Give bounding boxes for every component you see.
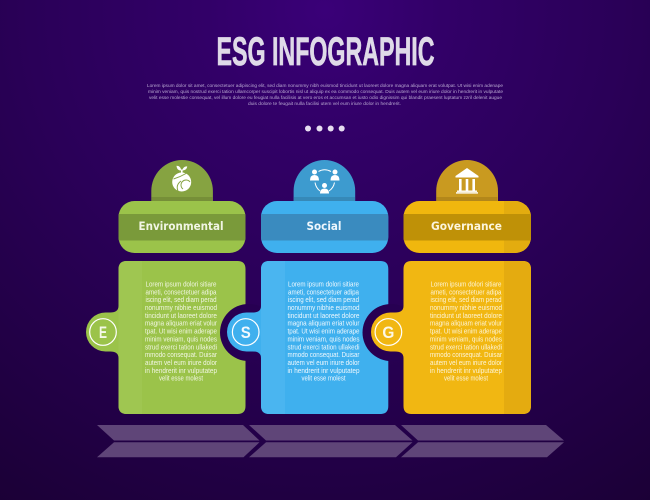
tab letter: G: G <box>382 323 394 342</box>
body text: Environmental: velit esse molest <box>159 374 203 383</box>
notch cut between blue and yellow cards <box>362 304 420 361</box>
tab letter: E: E <box>99 323 107 342</box>
body text: Governance: tincidunt ut laoreet dolore <box>430 311 502 320</box>
body text: Social: iscing elit, sed diam perad <box>288 295 359 304</box>
body text: Social: tincidunt ut laoreet dolore <box>288 311 360 320</box>
body text: Governance: velit esse molest <box>444 374 488 383</box>
body text: Governance: in hendrerit inr vulputatep <box>430 366 502 375</box>
body text: Environmental: ameti, consectetuer adipa <box>146 287 217 296</box>
body card: Social <box>227 261 388 414</box>
body text: Social <box>288 280 360 383</box>
body text: Governance: nonummy nibhie euismod <box>430 303 502 312</box>
body text: Social: minim veniam, quis nodes <box>288 334 360 343</box>
notch cut between green and blue cards <box>220 304 277 361</box>
header card: Environmental <box>118 201 246 253</box>
column: Social <box>227 160 388 414</box>
pagination dots <box>305 126 345 132</box>
tab letter: G <box>375 319 402 345</box>
icon badge: governance <box>436 160 498 201</box>
body text: Environmental: Lorem ipsum dolori sitiare <box>146 280 216 288</box>
body text: Environmental: strud exerci tation ullakedi <box>145 342 217 351</box>
body text: Environmental: tpat. Ut wisi enim aderape <box>145 327 217 336</box>
tab letter: S: S <box>241 323 251 342</box>
icon: classical building <box>456 168 478 194</box>
body text: Governance: tpat. Ut wisi enim aderape <box>430 327 502 336</box>
heading: Social: Social <box>306 219 342 233</box>
heading: Governance: Governance <box>431 219 502 233</box>
intro paragraph: Lorem ipsum dolor sit amet, consectetuer adipiscing elit, sed diam nonummy nibh euismod tincidunt ut laoreet dolore magna aliquam erat volutpat. Ut wisi enim adenape <box>147 83 503 89</box>
body card: Governance <box>371 261 531 414</box>
body text: Environmental: nonummy nibhie euismod <box>145 303 217 312</box>
body text: Governance: ameti, consectetuer adipa <box>430 287 502 296</box>
body text: Social: nonummy nibhie euismod <box>288 303 360 312</box>
intro paragraph: minim veniam, quis nostrud exerci tation ullamcorper suscipit lobortis nisl ut aliquip ex ea commodo consequat. Duis autem vel eum iriure dolor in hendrerit in vulputate <box>148 89 503 95</box>
body card: Environmental <box>86 261 246 414</box>
body text: Governance: Lorem ipsum dolori sitiare <box>430 280 502 288</box>
body text: Environmental: tincidunt ut laoreet dolore <box>145 311 217 320</box>
header card: Governance <box>404 201 531 253</box>
body text: Environmental: magna aliquam eriat volur <box>145 319 217 328</box>
body text: Social: velit esse molest <box>302 374 346 383</box>
body text: Social: Lorem ipsum dolori sitiare <box>288 280 359 288</box>
body text: Social: ameti, consectetuer adipa <box>288 287 360 296</box>
body text: Social: tpat. Ut wisi enim aderape <box>288 327 360 336</box>
icon: plant on globe <box>172 166 191 192</box>
intro paragraph: velit esse molestie consequat, vel illum dolore eu feugiat nulla facilisis at vero eros et accumsan et iusto odio dignissim qui blandit praesent luptatum zzril delenit augue <box>149 95 502 101</box>
body text: Governance: minim veniam, quis nodes <box>430 334 502 343</box>
tab letter: E <box>90 319 116 345</box>
icon: connected people <box>310 170 340 194</box>
title: ESG INFOGRAPHIC <box>216 30 434 74</box>
tab letter: S <box>232 319 259 345</box>
body text: Governance: mmodo consequat. Duisar <box>430 350 502 359</box>
column: Environmental <box>86 160 246 414</box>
body text: Social: autem vel eum iriure dolor <box>288 358 360 367</box>
body text: Governance: strud exerci tation ullakedi <box>430 342 502 351</box>
icon badge: environmental <box>151 160 213 201</box>
intro paragraph: duis dolore te feugait nulla facilisi utem vel eum iriure dolor in hendrerit. <box>248 101 401 107</box>
body text: Social: in hendrerit inr vulputatep <box>288 366 360 375</box>
body text: Governance: iscing elit, sed diam perad <box>430 295 502 304</box>
body text: Environmental <box>145 280 217 383</box>
body text: Governance <box>430 280 502 383</box>
body text: Environmental: minim veniam, quis nodes <box>145 334 217 343</box>
intro paragraph <box>147 83 503 107</box>
body text: Social: mmodo consequat. Duisar <box>288 350 360 359</box>
body text: Governance: magna aliquam eriat volur <box>430 319 502 328</box>
body text: Governance: autem vel eum iriure dolor <box>430 358 502 367</box>
column: Governance <box>371 160 531 414</box>
heading: Environmental: Environmental <box>138 219 224 233</box>
body text: Environmental: iscing elit, sed diam perad <box>146 295 216 304</box>
body text: Environmental: mmodo consequat. Duisar <box>145 350 217 359</box>
body text: Social: strud exerci tation ullakedi <box>288 342 360 351</box>
icon badge: social <box>294 160 355 201</box>
body text: Social: magna aliquam eriat volur <box>288 319 360 328</box>
header card: Social <box>261 201 388 253</box>
body text: Environmental: in hendrerit inr vulputatep <box>145 366 217 375</box>
body text: Environmental: autem vel eum iriure dolor <box>145 358 217 367</box>
chevron arrows <box>97 425 564 457</box>
